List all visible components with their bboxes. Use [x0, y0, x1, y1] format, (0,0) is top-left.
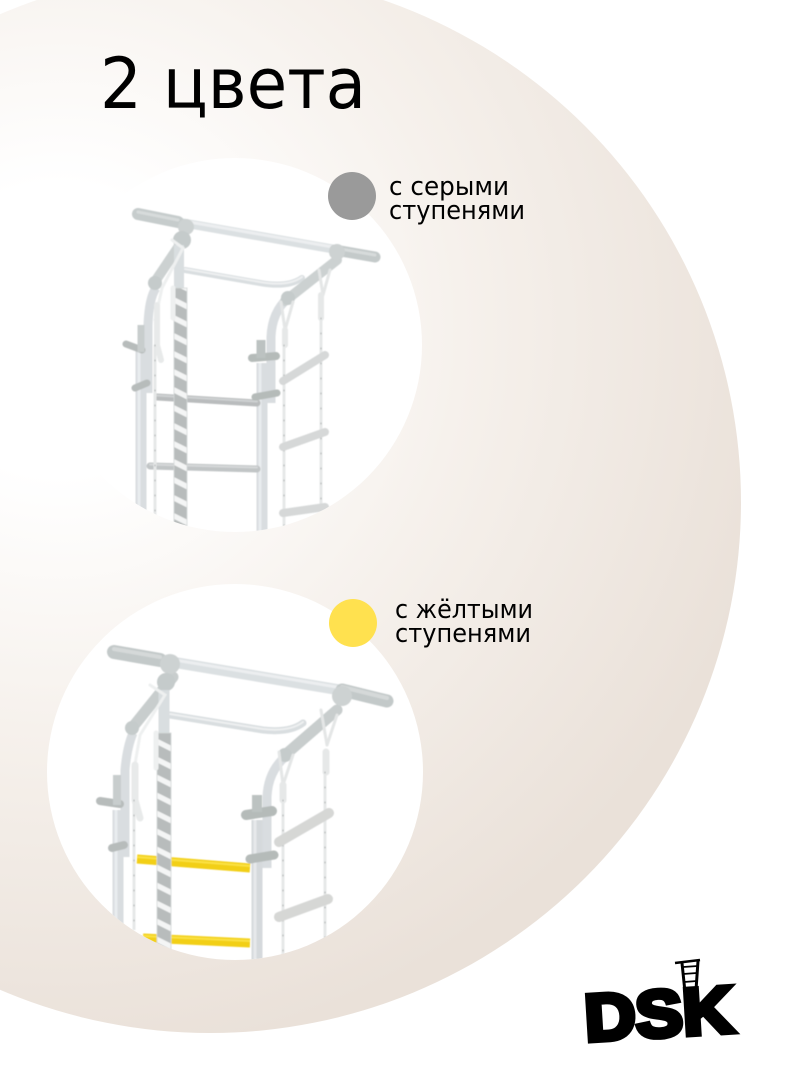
- label: yellow steps: ступенями: [395, 619, 531, 649]
- illustration: wall bars with yellow steps: [100, 649, 387, 965]
- panel: yellow-step option: [47, 584, 533, 965]
- label: grey steps: ступенями: [389, 196, 525, 226]
- illustration: wall bars with grey steps: [126, 212, 375, 540]
- dot: grey swatch: [328, 172, 376, 220]
- white circle: yellow version: [47, 584, 423, 960]
- label: grey steps: с серыми: [389, 172, 509, 202]
- label: yellow steps: с жёлтыми: [395, 595, 533, 625]
- title: 2 цвета: [100, 43, 366, 125]
- logo: DSK with ladder: [582, 960, 736, 1055]
- logo wordmark: DSK: [582, 972, 736, 1055]
- logo ladder: [675, 960, 700, 992]
- panel: grey-step option: [122, 159, 523, 532]
- dot: yellow swatch: [329, 599, 377, 647]
- white circle: grey version: [48, 158, 422, 532]
